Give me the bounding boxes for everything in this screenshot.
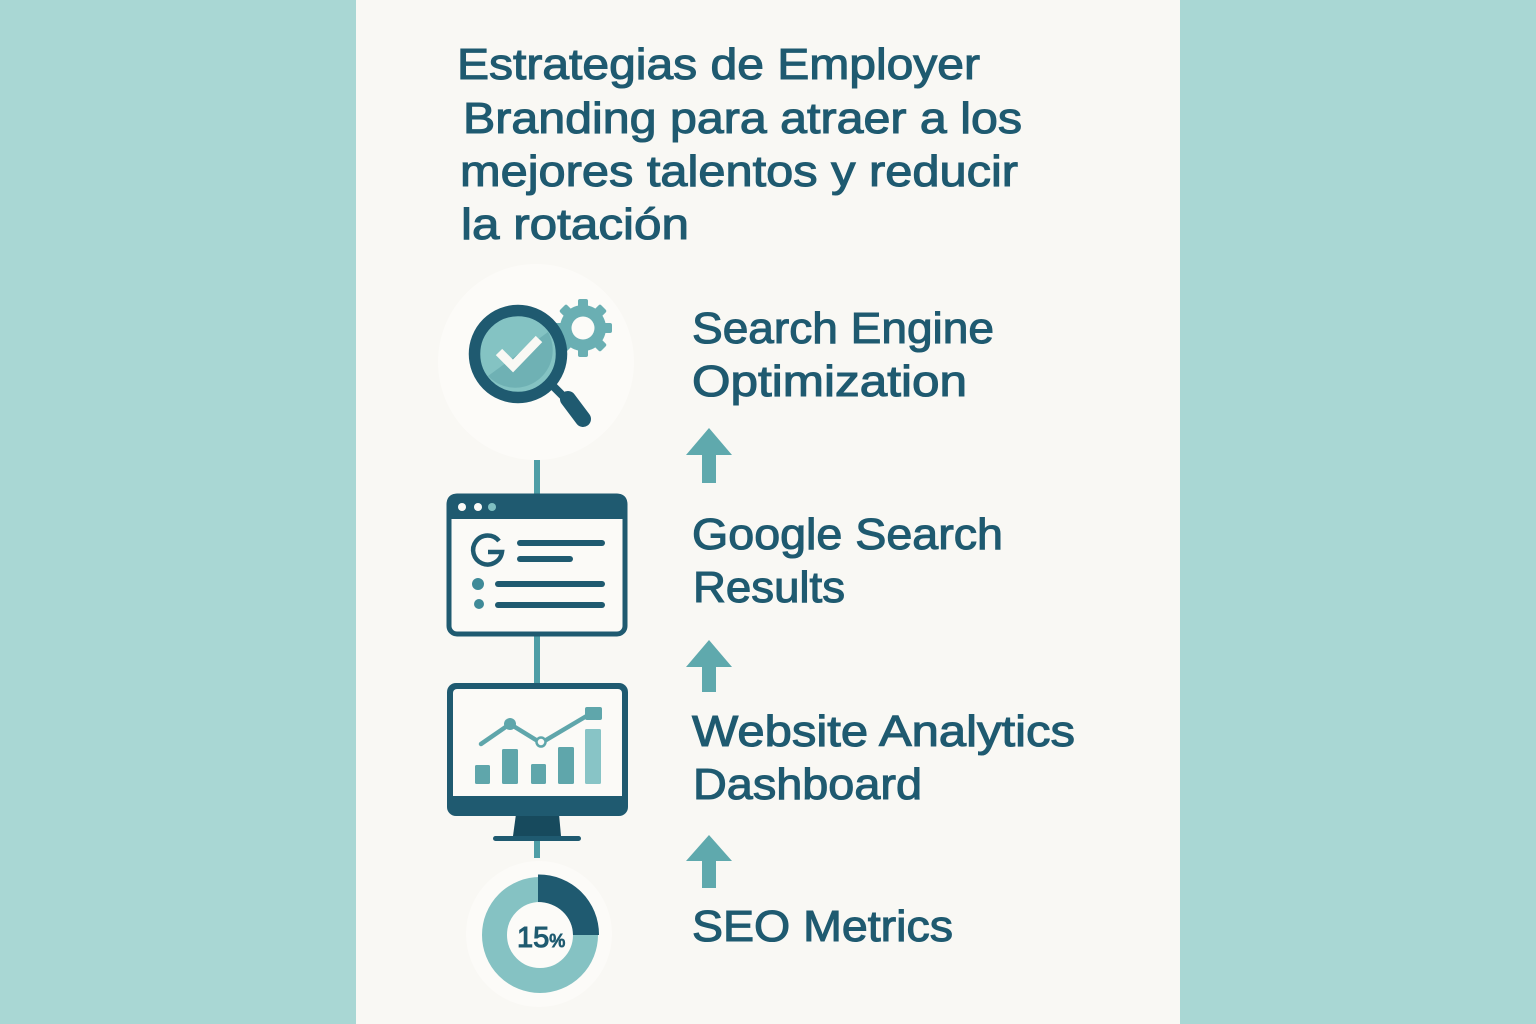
title: Estrategias de Employer — [457, 40, 980, 89]
icon: analytics monitor — [447, 683, 628, 841]
arrow: up 1 — [686, 428, 732, 483]
label: Website Analytics Dashboard — [692, 707, 1075, 809]
icon: donut chart 15% — [466, 861, 612, 1007]
arrow: up 3 — [686, 835, 732, 888]
label: Google Search Results: Google Search — [692, 510, 1003, 559]
monitor body — [447, 683, 628, 816]
title: la rotación — [461, 200, 689, 249]
connector: search to browser — [534, 460, 540, 495]
label: Search Engine Optimization: Search Engine — [692, 304, 994, 353]
label: Search Engine Optimization: Optimization — [692, 357, 967, 406]
label: Website Analytics Dashboard: Website Analytics — [692, 707, 1075, 756]
icon: magnifying glass with gear — [438, 264, 634, 460]
monitor stand — [513, 814, 561, 836]
label: SEO Metrics: SEO Metrics — [692, 902, 953, 951]
icon: magnifier handle — [553, 386, 583, 419]
donut value: 15% — [517, 922, 565, 954]
label: Website Analytics Dashboard: Dashboard — [693, 760, 922, 809]
label: Search Engine Optimization — [692, 304, 994, 406]
connector: monitor to donut — [534, 840, 540, 858]
icon: check mark — [499, 339, 539, 366]
icon: letter G — [473, 536, 502, 565]
arrow: up 2 — [686, 640, 732, 692]
connector: browser to monitor — [534, 635, 540, 684]
panel: central page — [356, 0, 1180, 1024]
title — [457, 40, 1022, 249]
line chart — [481, 707, 602, 746]
title: Branding para atraer a los — [463, 94, 1022, 143]
icon: magnifier lens — [474, 310, 562, 398]
label: Google Search Results: Results — [693, 563, 845, 612]
icon: browser search window — [447, 494, 627, 634]
bar chart — [475, 729, 601, 784]
icon: gear — [554, 299, 612, 357]
label: Google Search Results — [692, 510, 1003, 612]
title: mejores talentos y reducir — [460, 147, 1018, 196]
